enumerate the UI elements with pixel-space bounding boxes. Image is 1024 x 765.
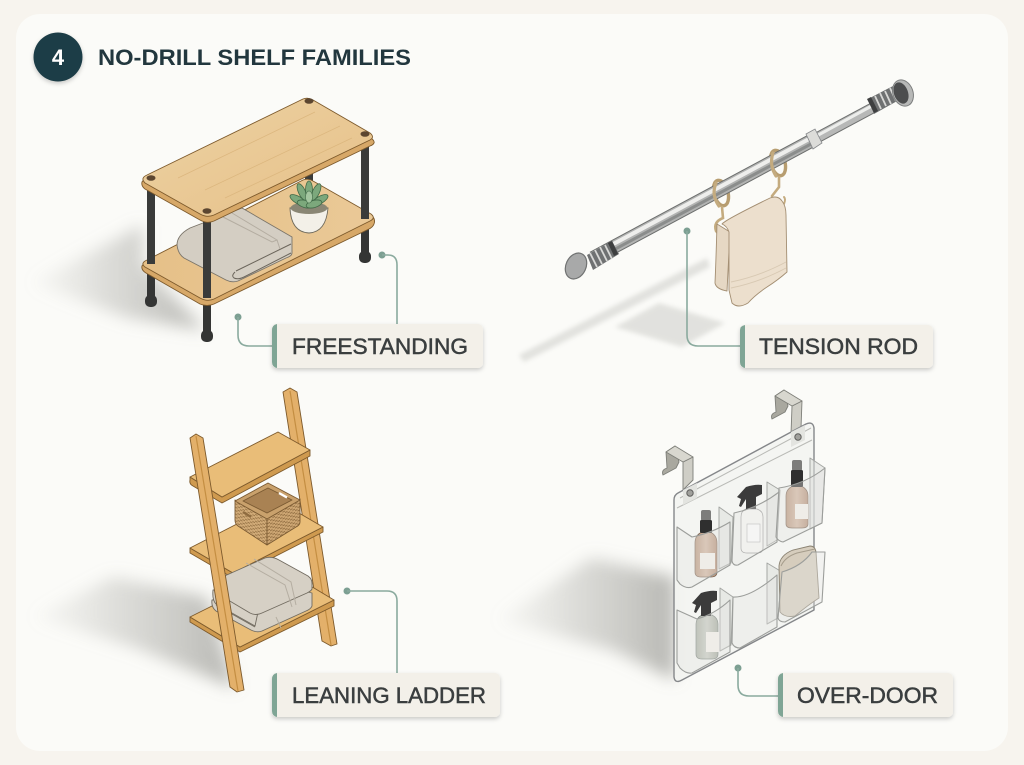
lower board — [142, 179, 375, 306]
step number badge: 4 — [52, 45, 65, 70]
back leg — [305, 170, 313, 192]
bottle: sage spray — [692, 591, 719, 659]
connector: tension rod — [684, 228, 740, 346]
backing sheet — [674, 423, 814, 681]
springs — [587, 86, 899, 270]
label: freestanding: FREESTANDING — [292, 334, 468, 359]
cloth fold — [781, 549, 815, 566]
connector: over-door — [734, 664, 778, 696]
illustration: over-door organizer — [498, 390, 825, 681]
label: tension rod: TENSION ROD — [759, 334, 918, 359]
shadow: freestanding — [32, 225, 205, 330]
left rail — [190, 434, 244, 692]
right rail — [283, 388, 337, 646]
illustration: tension rod — [519, 77, 917, 362]
bottle: amber spray — [695, 510, 717, 577]
illustration: leaning ladder — [34, 388, 337, 692]
connector: freestanding lower — [234, 314, 272, 346]
succulent in pot — [288, 181, 330, 233]
bottle: amber tall — [786, 460, 808, 528]
bottom shelf — [190, 570, 334, 652]
top shelf — [190, 432, 310, 503]
pocket gussets — [719, 458, 825, 651]
middle shelf — [190, 502, 323, 578]
shadow: organizer — [498, 558, 675, 680]
left hook — [662, 446, 693, 490]
label: tension rod — [740, 325, 933, 368]
top board — [142, 98, 374, 222]
folded cloth — [779, 546, 819, 616]
front leg upper segments — [147, 190, 211, 298]
top band — [677, 428, 812, 508]
lower leg segments and feet — [145, 225, 371, 342]
shadow: tension rod — [519, 258, 725, 362]
shadow: ladder — [34, 577, 235, 688]
title: NO-DRILL SHELF FAMILIES — [98, 45, 411, 70]
rod collar — [806, 129, 822, 149]
towel stack — [212, 557, 312, 632]
label: leaning ladder: LEANING LADDER — [292, 683, 486, 708]
label: over-door: OVER-DOOR — [797, 683, 938, 708]
step number badge — [34, 32, 82, 82]
rod tube — [592, 102, 880, 261]
connector: leaning ladder — [344, 588, 397, 673]
pockets — [677, 468, 825, 673]
label: freestanding — [272, 324, 483, 368]
right hook — [772, 390, 802, 434]
folded towel — [177, 208, 292, 282]
wicker basket — [235, 483, 300, 545]
hand towel — [715, 197, 787, 306]
connector: freestanding upper — [378, 252, 397, 324]
label: over-door — [778, 673, 953, 717]
illustration: freestanding shelf — [32, 98, 375, 342]
end caps — [561, 77, 917, 282]
ring fronts and hook shanks — [714, 153, 785, 234]
bottle: white spray — [737, 485, 763, 553]
rod back ring halves — [711, 149, 788, 207]
label: leaning ladder — [272, 673, 500, 717]
grommets — [683, 425, 805, 505]
right leg above lower board — [361, 143, 369, 219]
